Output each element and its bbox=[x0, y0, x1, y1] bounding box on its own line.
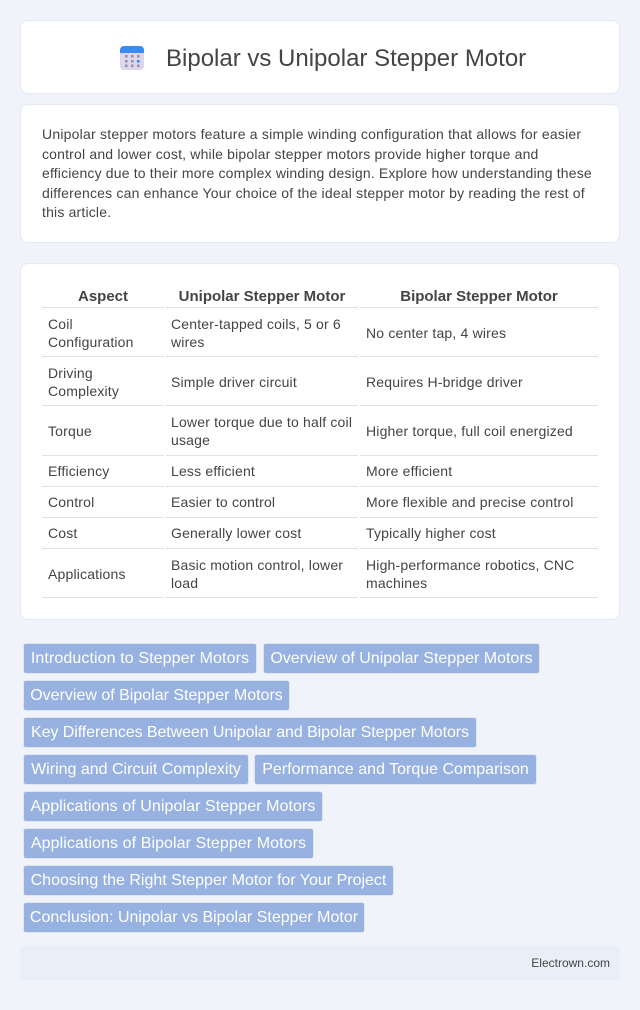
row: efficiency: Efficiency bbox=[48, 463, 109, 479]
intro text: differences can enhance Your choice of the ideal stepper motor by reading the rest of bbox=[42, 184, 585, 200]
row: driving complexity: Complexity bbox=[48, 383, 119, 399]
row: driving complexity bbox=[48, 365, 523, 399]
tag: overview bipolar: Overview of Bipolar Stepper Motors bbox=[30, 687, 283, 704]
title: Bipolar vs Unipolar Stepper Motor bbox=[166, 45, 526, 72]
tag: introduction bbox=[23, 643, 257, 674]
tag: conclusion: Conclusion: Unipolar vs Bipolar Stepper Motor bbox=[30, 909, 358, 926]
row: coil configuration: No center tap, 4 wires bbox=[366, 325, 506, 341]
row: torque: usage bbox=[171, 432, 210, 448]
table header: Bipolar Stepper Motor bbox=[400, 288, 558, 305]
tag: overview unipolar: Overview of Unipolar Stepper Motors bbox=[270, 650, 533, 667]
row: torque: Torque bbox=[48, 423, 92, 439]
row: applications bbox=[48, 557, 574, 591]
row: coil configuration bbox=[48, 316, 506, 350]
row: control: More flexible and precise control bbox=[366, 494, 573, 510]
header card bbox=[20, 20, 620, 94]
tag: applications bipolar: Applications of Bipolar Stepper Motors bbox=[31, 835, 306, 852]
row: driving complexity: Driving bbox=[48, 365, 93, 381]
tag: performance: Performance and Torque Comparison bbox=[262, 761, 529, 778]
tag: key differences bbox=[23, 717, 477, 748]
tag: overview bipolar bbox=[23, 680, 290, 711]
row: applications: Applications bbox=[48, 566, 126, 582]
row: driving complexity: Simple driver circuit bbox=[171, 374, 297, 390]
row: applications: machines bbox=[366, 575, 427, 591]
intro card bbox=[20, 104, 620, 243]
intro text: Unipolar stepper motors feature a simple winding configuration that allows for easier bbox=[42, 126, 581, 142]
row: control: Easier to control bbox=[171, 494, 275, 510]
tag: performance bbox=[254, 754, 537, 785]
tag: choosing bbox=[23, 865, 394, 896]
tag: choosing: Choosing the Right Stepper Motor for Your Project bbox=[31, 872, 386, 889]
intro text: efficiency due to their more complex winding design. Explore how understanding these bbox=[42, 165, 592, 181]
row: cost bbox=[48, 525, 496, 541]
intro text bbox=[42, 126, 592, 220]
tag: applications bipolar bbox=[23, 828, 314, 859]
tag: applications unipolar: Applications of Unipolar Stepper Motors bbox=[30, 798, 316, 815]
tag: introduction: Introduction to Stepper Motors bbox=[31, 650, 249, 667]
row: coil configuration: Coil bbox=[48, 316, 73, 332]
intro text: this article. bbox=[42, 204, 111, 220]
row: efficiency: Less efficient bbox=[171, 463, 255, 479]
row: control: Control bbox=[48, 494, 94, 510]
row: applications: Basic motion control, lower bbox=[171, 557, 343, 573]
row: efficiency: More efficient bbox=[366, 463, 452, 479]
row: control bbox=[48, 494, 573, 510]
row: cost: Generally lower cost bbox=[171, 525, 301, 541]
row: cost: Typically higher cost bbox=[366, 525, 496, 541]
icon: calendar bbox=[120, 46, 144, 70]
comparison table card bbox=[20, 263, 620, 620]
tag: wiring bbox=[23, 754, 249, 785]
tag: key differences: Key Differences Between Unipolar and Bipolar Stepper Motors bbox=[31, 724, 469, 741]
tag: applications unipolar bbox=[23, 791, 323, 822]
table header: Aspect bbox=[78, 288, 128, 305]
row: applications: load bbox=[171, 575, 198, 591]
row: applications: High-performance robotics, CNC bbox=[366, 557, 574, 573]
table header bbox=[78, 288, 558, 305]
row: torque bbox=[48, 414, 573, 448]
row: driving complexity: Requires H-bridge driver bbox=[366, 374, 523, 390]
table header: Unipolar Stepper Motor bbox=[179, 288, 345, 305]
tag: wiring: Wiring and Circuit Complexity bbox=[31, 761, 241, 778]
footer bbox=[20, 946, 620, 980]
row: coil configuration: Configuration bbox=[48, 334, 134, 350]
row: torque: Higher torque, full coil energized bbox=[366, 423, 573, 439]
tag: overview unipolar bbox=[263, 643, 540, 674]
footer credit: Electrown.com bbox=[531, 956, 610, 970]
row: efficiency bbox=[48, 463, 452, 479]
row: coil configuration: wires bbox=[171, 334, 205, 350]
tag: conclusion bbox=[23, 902, 365, 933]
intro text: control and lower cost, while bipolar stepper motors provide higher torque and bbox=[42, 146, 539, 162]
row: coil configuration: Center-tapped coils, 5 or 6 bbox=[171, 316, 341, 332]
row: torque: Lower torque due to half coil bbox=[171, 414, 352, 430]
row: cost: Cost bbox=[48, 525, 78, 541]
